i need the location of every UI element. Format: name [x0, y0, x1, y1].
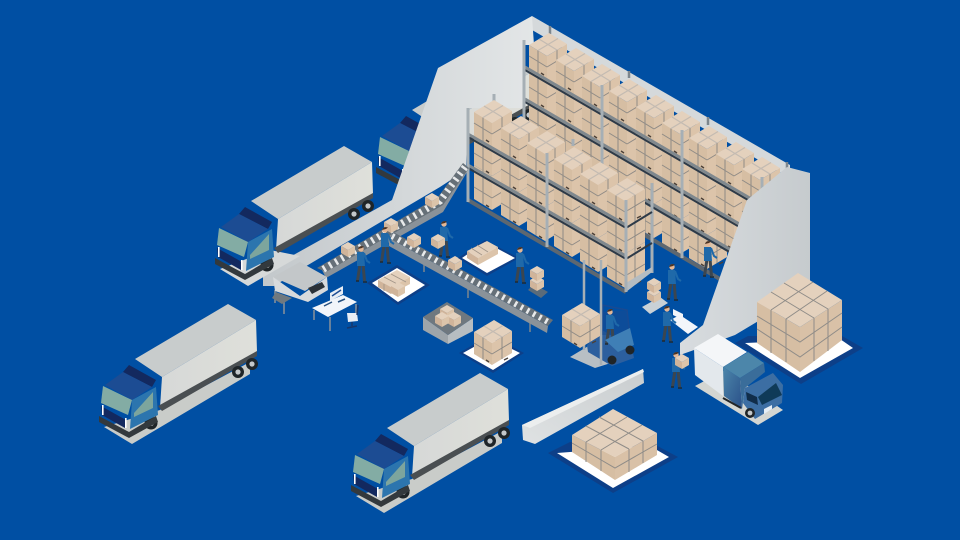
- wall: right: [680, 167, 810, 355]
- back rack floor level: [525, 130, 727, 282]
- left wall and dock: [263, 16, 534, 286]
- truck: upper left: [215, 146, 374, 286]
- back rack second level: [525, 64, 780, 239]
- back rack rear posts: [550, 26, 787, 176]
- rack: front: [468, 94, 652, 292]
- front rack top level: [468, 100, 652, 228]
- conveyor: lower: [389, 233, 553, 333]
- conveyor: upper: [317, 163, 469, 278]
- pallet: front: [548, 409, 678, 493]
- rack: back: [524, 26, 787, 282]
- back rack third level: [525, 96, 754, 261]
- forklift: [562, 260, 634, 368]
- crate with boxes: [423, 302, 473, 344]
- person: with hand cart right: [642, 264, 681, 314]
- person: carrying box: [431, 221, 453, 257]
- truck: lower left: [99, 304, 258, 444]
- person: at truck: [671, 352, 689, 388]
- person: at rack: [703, 241, 717, 277]
- pallet: large right: [735, 273, 863, 384]
- back rack front posts: [524, 40, 762, 258]
- back rack top level: [525, 33, 780, 207]
- barrier: [522, 369, 644, 444]
- back wall top: [532, 16, 790, 178]
- front rack rear posts: [494, 94, 652, 273]
- desk: right: [670, 309, 698, 334]
- truck: bottom centre: [351, 373, 510, 513]
- desk: left: [312, 286, 357, 331]
- small truck: [694, 334, 783, 425]
- pallet: small right: [458, 240, 519, 276]
- front rack front posts: [468, 108, 626, 292]
- scanner machine: [272, 262, 328, 314]
- front rack bottom level: [468, 164, 652, 292]
- person: with hand cart left: [515, 247, 548, 298]
- person: conveyor left: [356, 246, 370, 282]
- person: at desk: [662, 306, 676, 342]
- front rack middle level: [468, 130, 652, 259]
- person: conveyor middle: [380, 227, 394, 263]
- chair: [347, 305, 358, 328]
- pallet: small left: [367, 265, 430, 305]
- pallet: single stack: [459, 320, 524, 373]
- truck: behind wall: [376, 55, 535, 189]
